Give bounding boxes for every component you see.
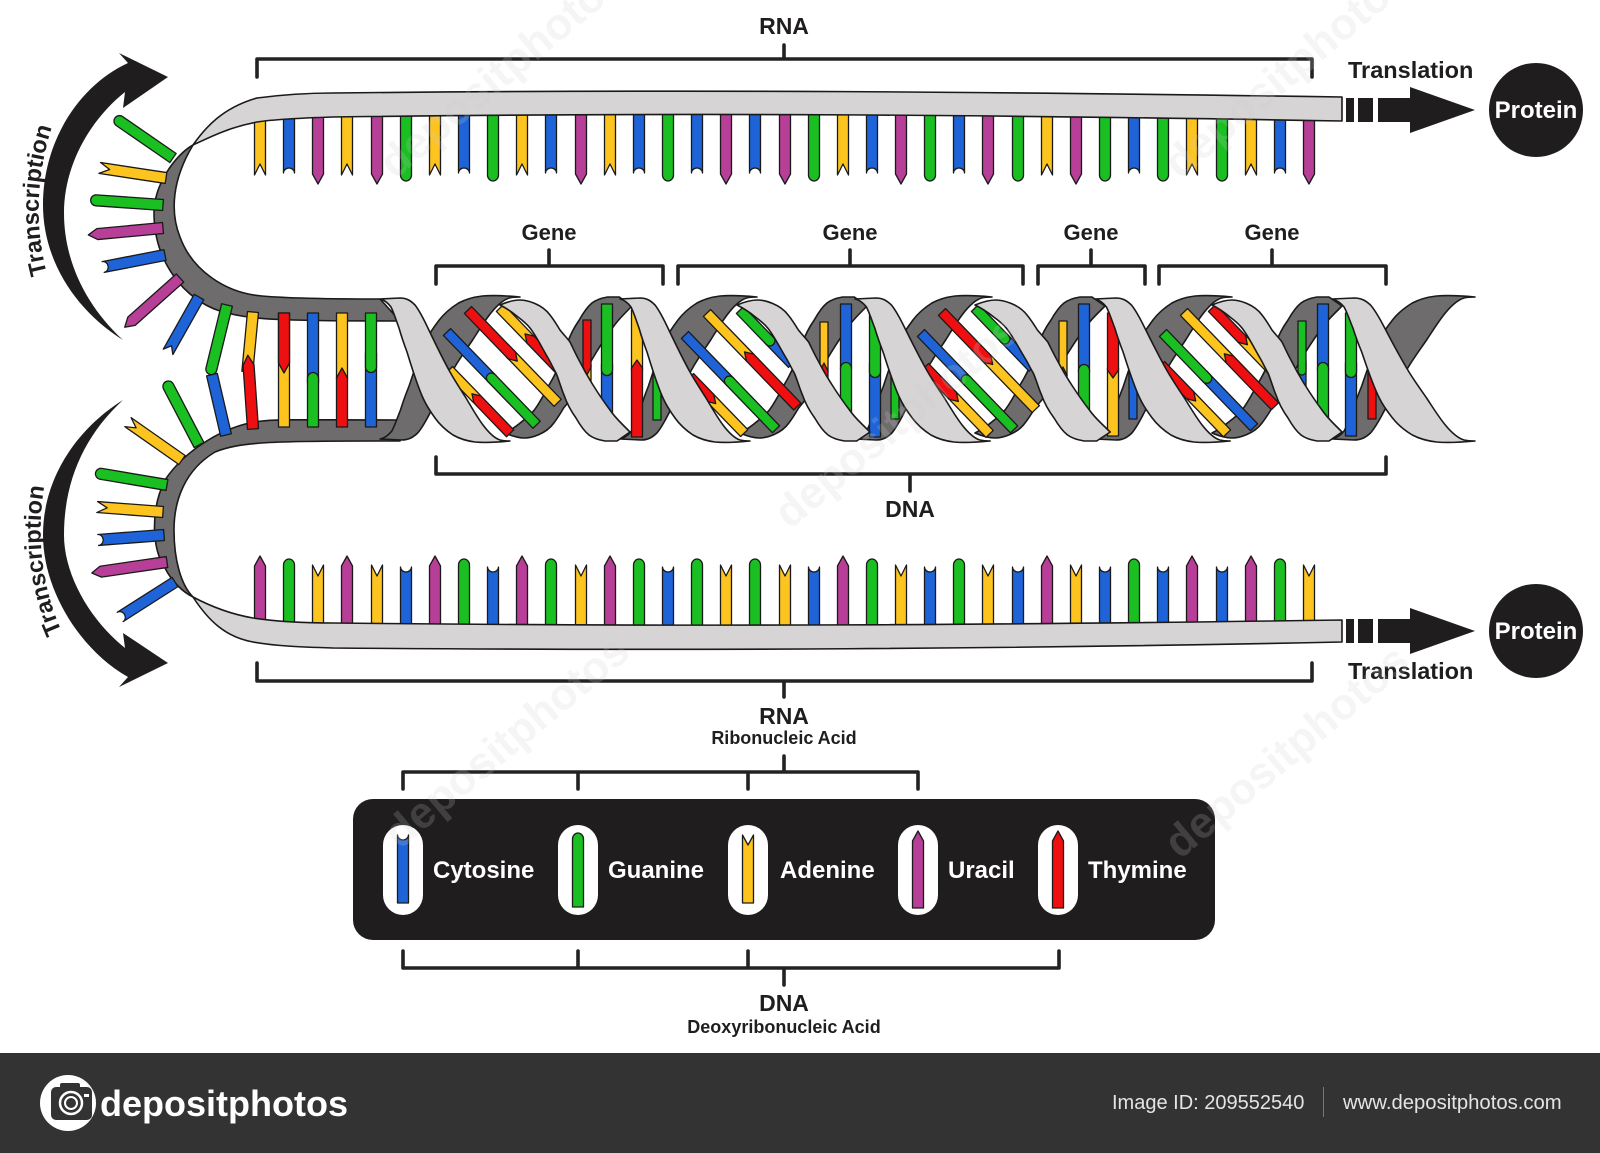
footer bar — [0, 1053, 1600, 1153]
DNA helix back strand segments — [380, 296, 1475, 440]
helix base pairs: lobe 2 — [583, 304, 661, 437]
upper transcription label: Transcription — [22, 126, 52, 278]
free bases on upper unzipped strand — [88, 113, 204, 355]
DNA legend heading — [687, 990, 881, 1037]
bottom RNA ribbon — [193, 597, 1342, 649]
DNA helix front ribbon segments — [380, 298, 1475, 442]
icon: camera logo — [40, 1075, 96, 1131]
legend item: Uracil: Uracil — [948, 857, 1015, 884]
top RNA bracket with label — [257, 13, 1312, 77]
top RNA bracket with label: RNA — [759, 13, 809, 39]
top translation label: Translation — [1348, 57, 1473, 83]
legend item: Guanine — [558, 825, 704, 915]
bottom RNA nucleotides — [254, 556, 1314, 630]
Gene bracket 1 — [436, 220, 663, 284]
watermark: depositphotos — [765, 305, 1029, 538]
paired bases between opening strands — [205, 304, 376, 436]
bottom RNA bracket — [257, 663, 1312, 697]
top protein circle: Protein — [1495, 97, 1577, 124]
legend item: Adenine — [728, 825, 875, 915]
legend item: Cytosine: Cytosine — [433, 857, 534, 884]
bottom protein circle — [1489, 584, 1583, 678]
Gene bracket 2: Gene — [822, 220, 878, 245]
helix base pairs: lobe 6 — [1059, 304, 1137, 436]
bottom translation label: Translation — [1348, 658, 1473, 684]
RNA legend heading: Ribonucleic Acid — [711, 728, 857, 748]
Gene bracket 2 — [678, 220, 1023, 284]
footer divider — [1323, 1087, 1324, 1117]
RNA legend heading — [711, 703, 857, 748]
bottom protein circle: Protein — [1495, 618, 1577, 645]
helix base pairs: lobe 8 — [1298, 304, 1376, 436]
top RNA ribbon — [193, 91, 1342, 145]
DNA legend heading: DNA — [759, 990, 809, 1016]
image id: Image ID: 209552540 — [1112, 1092, 1304, 1114]
helix base pairs: lobe 7 — [1157, 305, 1280, 437]
RNA legend bracket — [403, 756, 918, 789]
helix base pairs: lobe 1 — [443, 305, 563, 437]
Gene bracket 3: Gene — [1063, 220, 1119, 245]
DNA bracket with label — [436, 457, 1386, 522]
website: www.depositphotos.com — [1342, 1092, 1562, 1114]
watermark — [370, 0, 1419, 868]
lower transcription arrow — [43, 400, 168, 687]
Gene bracket 1: Gene — [521, 220, 577, 245]
top translation arrow — [1346, 87, 1475, 133]
helix base pairs: lobe 4 — [820, 304, 899, 437]
watermark: depositphotos — [375, 625, 639, 858]
lower strand backbone dark band — [154, 420, 400, 597]
lower transcription label: Transcription — [24, 486, 60, 638]
helix base pairs: lobe 5 — [917, 305, 1039, 437]
watermark: depositphotos — [1155, 635, 1419, 868]
DNA legend bracket — [403, 951, 1059, 985]
RNA legend heading: RNA — [759, 703, 809, 729]
bottom translation arrow — [1346, 608, 1475, 654]
legend item: Guanine: Guanine — [608, 857, 704, 884]
Gene bracket 3 — [1038, 220, 1145, 284]
panel: nucleotide legend — [353, 799, 1215, 940]
DNA legend heading: Deoxyribonucleic Acid — [687, 1017, 881, 1037]
brand wordmark: depositphotos — [100, 1083, 348, 1124]
legend item: Cytosine — [383, 825, 534, 915]
Gene bracket 4: Gene — [1244, 220, 1300, 245]
legend item: Thymine — [1038, 825, 1187, 915]
helix base pairs: lobe 3 — [681, 307, 801, 437]
DNA bracket with label: DNA — [885, 496, 935, 522]
legend item: Adenine: Adenine — [780, 857, 875, 884]
upper transcription arrow — [43, 53, 168, 340]
top strand backbone dark band — [154, 145, 400, 321]
Gene bracket 4 — [1159, 220, 1386, 284]
free bases on lower unzipped strand — [91, 379, 204, 622]
top protein circle — [1489, 63, 1583, 157]
top RNA nucleotides — [254, 110, 1314, 184]
legend item: Thymine: Thymine — [1088, 857, 1187, 884]
legend item: Uracil — [898, 825, 1015, 915]
